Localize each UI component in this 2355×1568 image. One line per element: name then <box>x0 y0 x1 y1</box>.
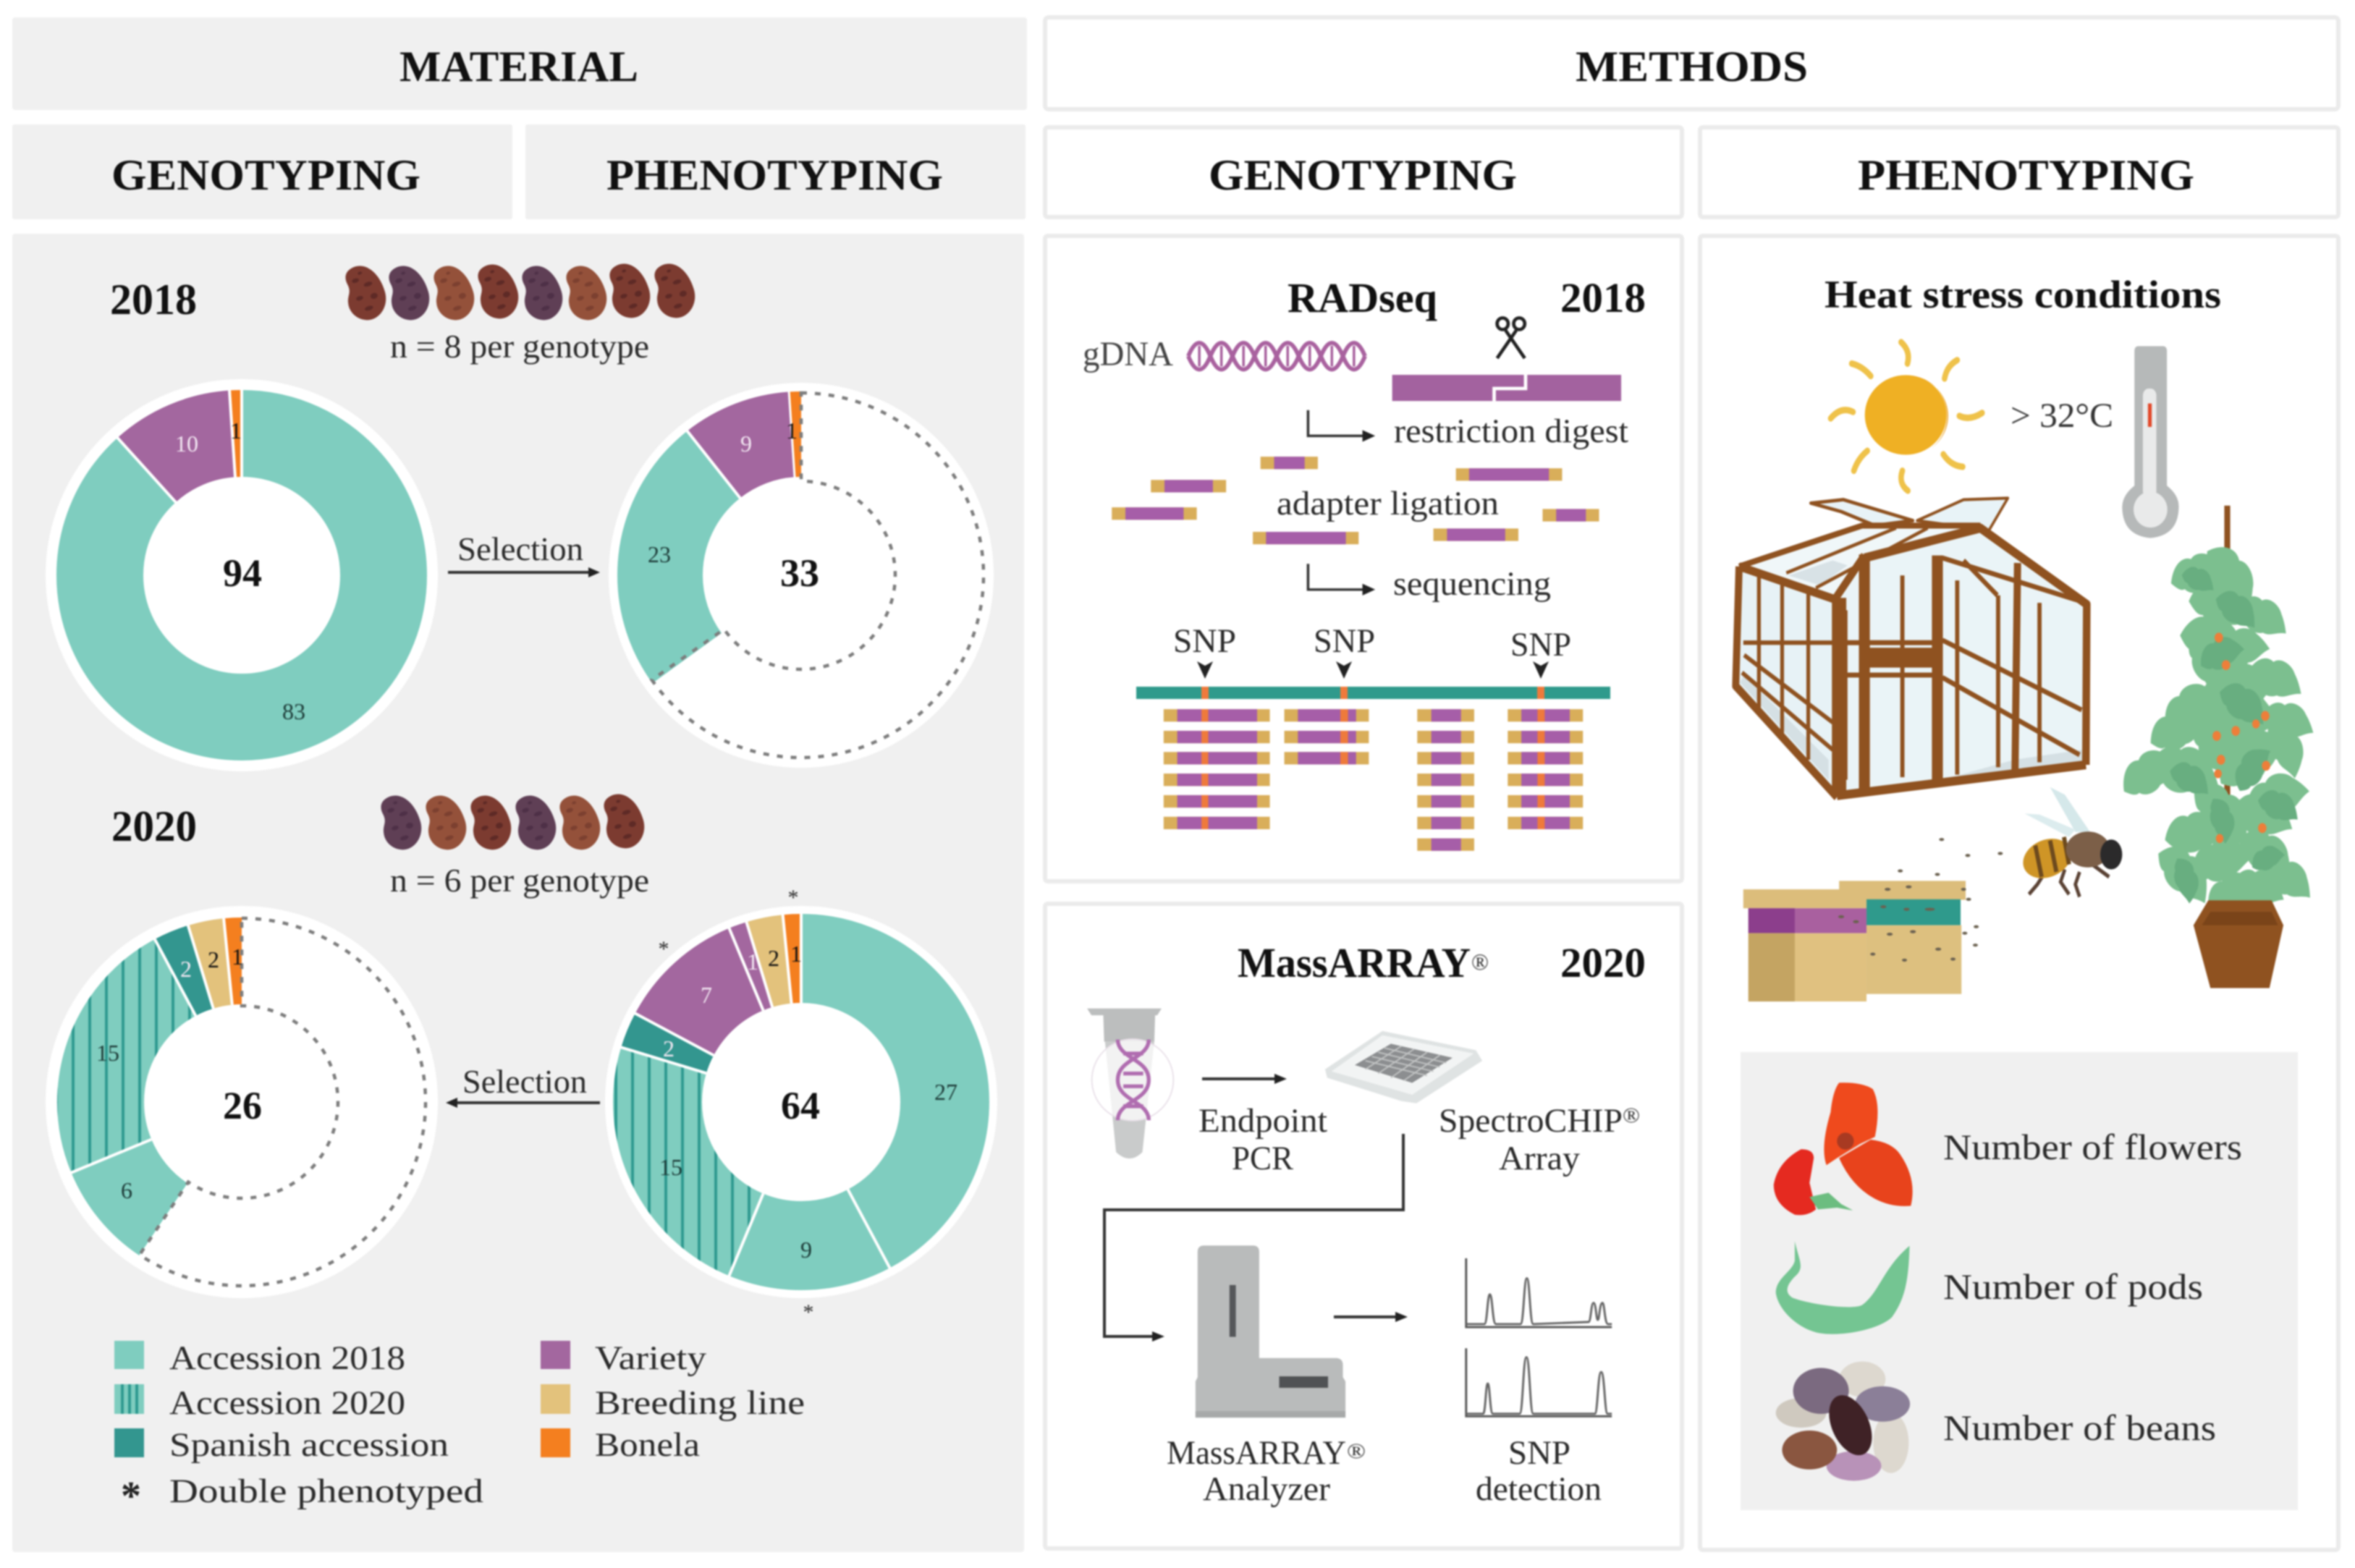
chart: donut 33: 23 <box>648 541 671 567</box>
legend: Accession 2020 <box>169 1384 405 1422</box>
legend: Variety <box>595 1339 707 1377</box>
heading: 2020: 2020 <box>1560 939 1646 986</box>
header: methods phenotyping: PHENOTYPING <box>1858 151 2194 199</box>
chart: SNP mass spectra <box>1466 1258 1612 1416</box>
arrow: chip to analyzer <box>1104 1134 1403 1342</box>
legend: Double phenotyped <box>169 1472 483 1510</box>
panel: phenotyping methods <box>1700 236 2338 1550</box>
heading: MassARRAY: MassARRAY <box>1238 939 1471 986</box>
label: SpectroCHIP Array <box>1439 1102 1640 1177</box>
label: SNP detection <box>1476 1434 1602 1508</box>
chart: donut 33: 9 <box>740 431 752 457</box>
label: number of flowers: Number of flowers <box>1943 1127 2242 1167</box>
header: methods <box>1045 17 2338 109</box>
heading: 2020: 2020 <box>111 802 197 850</box>
label: MassARRAY Analyzer: ® <box>1347 1439 1366 1463</box>
chart: donut 94: 83 <box>282 698 305 724</box>
SNP labels: SNP <box>1510 626 1571 664</box>
legend: Bonela <box>595 1426 700 1464</box>
legend: Spanish accession <box>169 1426 449 1464</box>
legend <box>114 1339 805 1519</box>
chart: donut 64: 64 <box>781 1084 820 1127</box>
aligned reads <box>1164 709 1583 851</box>
panel: material <box>12 234 1024 1552</box>
header: material: MATERIAL <box>399 43 638 90</box>
arrow: selection 2020: Selection <box>462 1063 587 1100</box>
label: SNP detection: SNP <box>1508 1434 1570 1472</box>
legend: * <box>121 1474 141 1519</box>
chart: donut 33 <box>609 383 994 768</box>
chart: donut 26: 1 <box>232 944 243 970</box>
heading: 2018: 2018 <box>1560 274 1646 321</box>
panel: MassARRAY <box>1045 904 1682 1548</box>
chart: donut 26: 6 <box>121 1177 132 1203</box>
chart: donut 94: 1 <box>230 418 242 444</box>
label: temperature: > 32°C <box>2011 397 2113 435</box>
icon: pod <box>1776 1241 1909 1334</box>
arrow: selection 2020 <box>446 1063 600 1108</box>
SNP labels: SNP <box>1314 622 1375 660</box>
chart: donut 64 <box>605 886 997 1324</box>
arrow: analyzer to detection <box>1334 1312 1408 1322</box>
header: methods phenotyping <box>1700 127 2338 217</box>
label: SpectroCHIP Array: SpectroCHIP <box>1439 1102 1623 1140</box>
chart: donut 64: 1 <box>790 941 802 967</box>
chart: donut 64: 15 <box>659 1154 682 1180</box>
panel: RADseq <box>1045 236 1682 881</box>
chart: donut 64: * <box>659 937 669 961</box>
chart: donut 26: 26 <box>223 1084 262 1127</box>
panel: traits measured <box>1741 1052 2298 1510</box>
label: Endpoint PCR: PCR <box>1232 1140 1294 1177</box>
heading: heat stress conditions: Heat stress conditions <box>1825 273 2221 316</box>
label: SpectroCHIP Array: Array <box>1499 1140 1581 1177</box>
header: methods genotyping: GENOTYPING <box>1209 151 1517 199</box>
header: material genotyping: GENOTYPING <box>111 151 420 199</box>
label: number of beans: Number of beans <box>1943 1407 2216 1448</box>
chart: donut 64: 9 <box>800 1237 812 1263</box>
icon: mixed beans <box>1776 1362 1910 1480</box>
label: MassARRAY Analyzer <box>1167 1434 1366 1508</box>
header: methods genotyping <box>1045 127 1682 217</box>
header: material phenotyping <box>525 124 1026 219</box>
arrow: selection 2018 <box>448 530 600 577</box>
chart: donut 64: 2 <box>768 945 779 971</box>
icon: sun <box>1830 342 1982 491</box>
chart: donut 64: 7 <box>701 982 712 1008</box>
label: MassARRAY Analyzer: MassARRAY <box>1167 1434 1346 1472</box>
label: MassARRAY Analyzer: Analyzer <box>1203 1470 1330 1508</box>
label: number of pods: Number of pods <box>1943 1266 2203 1307</box>
icon: six beans <box>373 789 650 855</box>
icon: greenhouse <box>1735 498 2086 797</box>
heading: RADseq: RADseq <box>1288 274 1437 321</box>
icon: eight beans <box>338 258 701 325</box>
heading: 2018: 2018 <box>110 276 197 323</box>
icon: thermometer <box>2122 346 2179 538</box>
chart: donut 26: 15 <box>96 1040 119 1066</box>
chart: donut 94: 94 <box>223 551 262 595</box>
text: n = 8: n = 8 per genotype <box>390 328 649 365</box>
icon: DNA helix <box>1188 343 1365 370</box>
icon: beehives <box>1743 838 2003 1001</box>
chart: donut 26 <box>46 906 438 1298</box>
label: SpectroCHIP Array: ® <box>1623 1103 1640 1127</box>
label: adapter ligation: adapter ligation <box>1277 485 1499 522</box>
label: gDNA: gDNA <box>1083 335 1173 373</box>
chart: donut 26: 2 <box>180 956 192 982</box>
adapter-ligated fragments <box>1112 457 1599 544</box>
arrow: to sequencing <box>1308 564 1375 596</box>
arrow: selection 2018: Selection <box>457 530 583 567</box>
reference sequence bar <box>1136 687 1610 699</box>
chart: donut 94 <box>46 379 438 771</box>
label: restriction digest: restriction digest <box>1394 412 1628 450</box>
icon: PCR tube <box>1087 1009 1173 1158</box>
SNP labels: SNP <box>1173 622 1236 660</box>
legend: Accession 2018 <box>169 1339 405 1377</box>
arrow: to restriction digest <box>1308 410 1375 441</box>
label: sequencing: sequencing <box>1393 565 1551 603</box>
chart: donut 64: 1 <box>747 949 758 975</box>
chart: donut 33: 1 <box>786 418 798 444</box>
icon: restriction site bar <box>1392 375 1621 401</box>
icon: bee <box>2019 787 2122 897</box>
heading: MassARRAY: ® <box>1471 949 1489 975</box>
legend: Breeding line <box>595 1384 805 1422</box>
icon: bean plant in pot <box>2115 506 2319 988</box>
icon: scissors <box>1497 318 1525 358</box>
icon: SpectroCHIP array <box>1325 1031 1482 1103</box>
header: material genotyping <box>12 124 512 219</box>
chart: donut 64: 27 <box>934 1079 957 1105</box>
chart: donut 26: 2 <box>208 946 219 972</box>
text: n = 6: n = 6 per genotype <box>390 862 649 899</box>
chart: donut 64: 2 <box>663 1035 675 1061</box>
SNP labels <box>1173 622 1571 679</box>
header: material <box>12 17 1027 110</box>
header: methods: METHODS <box>1576 43 1808 90</box>
header: material phenotyping: PHENOTYPING <box>606 151 943 199</box>
chart: donut 64: * <box>787 886 799 910</box>
icon: flower <box>1774 1082 1913 1215</box>
label: Endpoint PCR: Endpoint <box>1198 1102 1327 1140</box>
arrow: PCR to chip <box>1202 1074 1287 1084</box>
chart: donut 64: * <box>803 1300 813 1324</box>
label: Endpoint PCR <box>1198 1102 1327 1177</box>
label: SNP detection: detection <box>1476 1470 1602 1508</box>
icon: MassARRAY analyzer <box>1196 1245 1345 1417</box>
chart: donut 33: 33 <box>780 551 819 595</box>
chart: donut 94: 10 <box>175 431 198 457</box>
